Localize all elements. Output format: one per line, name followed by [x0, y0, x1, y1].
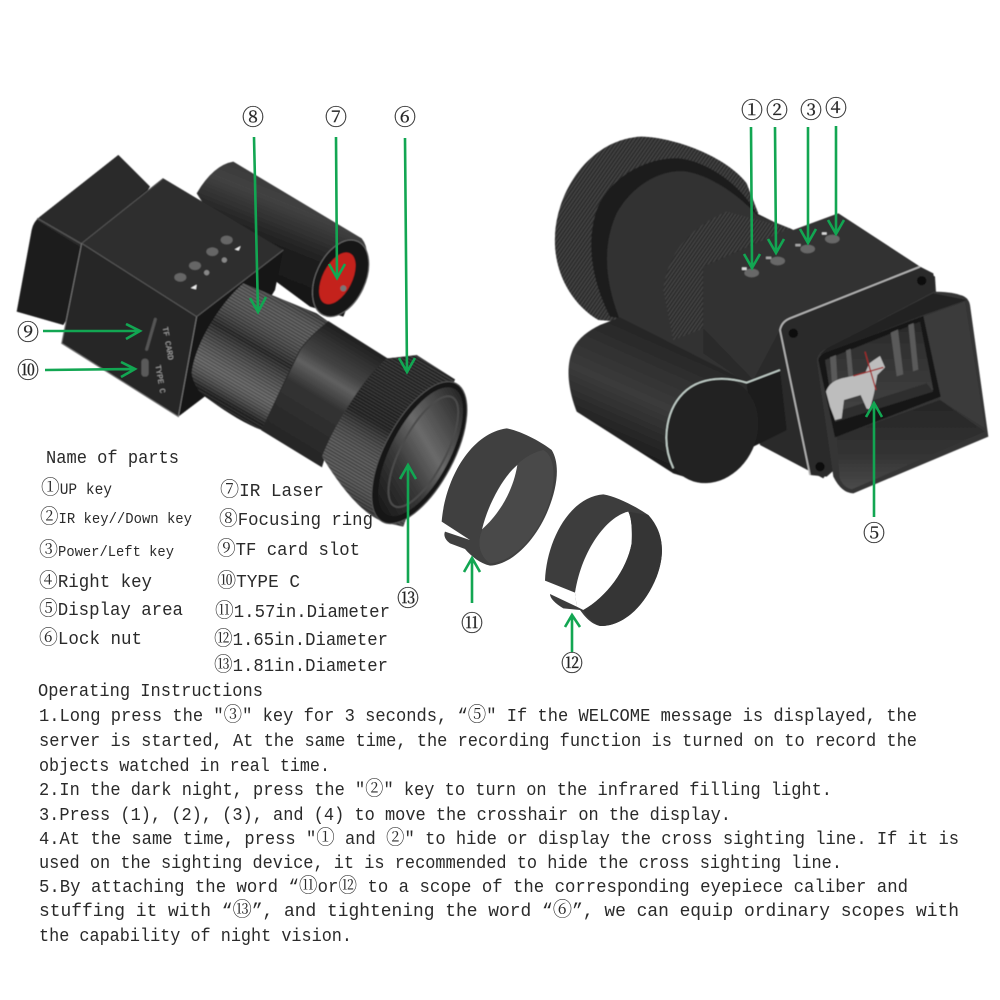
label 5 with arrow: ⑤ — [863, 517, 885, 548]
mid barrel — [262, 322, 387, 467]
label 1 with arrow: ① — [741, 94, 763, 125]
body housing — [703, 213, 937, 478]
part 8: ⑧Focusing ring — [219, 502, 373, 531]
thermal image of deer — [826, 356, 885, 420]
eyepiece hood — [817, 292, 988, 493]
label 6 with arrow — [394, 101, 416, 372]
part 2: ②IR key//Down key — [40, 500, 192, 529]
part 4: ④Right key — [39, 564, 152, 593]
label 5 with arrow — [863, 403, 885, 548]
label 2 with arrow — [766, 94, 788, 253]
instruction 1: server is started, At the same time, the recording function is turned on to record the — [39, 731, 917, 752]
label 12 with arrow — [561, 615, 583, 678]
label 3 with arrow — [800, 94, 822, 243]
dark groove — [591, 158, 773, 333]
label 13 with arrow: ⑬ — [397, 582, 419, 613]
lens barrel — [192, 283, 486, 538]
label 4 with arrow: ④ — [825, 92, 847, 123]
part 3: ③Power/Left key — [39, 533, 174, 562]
laser tube — [197, 162, 380, 326]
part 1: ①UP key — [41, 471, 112, 500]
instruction 5: stuffing it with “⑬”, and tightening the word “⑥”, we can equip ordinary scopes with — [39, 893, 959, 922]
instruction 5: the capability of night vision. — [39, 926, 352, 947]
parts heading: Name of parts — [46, 448, 179, 469]
rear of device — [555, 137, 937, 499]
instruction 1: 1.Long press the ″③″ key for 3 seconds, “⑤″ If the WELCOME message is displayed, the — [39, 698, 917, 727]
adapter ring 12 — [545, 494, 662, 626]
display screen — [818, 316, 941, 437]
label 3 with arrow: ③ — [800, 94, 822, 125]
part 6: ⑥Lock nut — [39, 621, 142, 650]
laser tube — [569, 317, 787, 499]
part 9: ⑨TF card slot — [217, 532, 360, 561]
part 11: ⑪1.57in.Diameter — [215, 594, 390, 623]
instruction 4: 4.At the same time, press ″① and ②″ to hide or display the cross sighting line. If it is — [39, 821, 959, 850]
device: left view with lens — [17, 155, 486, 538]
label 7 with arrow — [325, 101, 347, 278]
label 6 with arrow: ⑥ — [394, 101, 416, 132]
instruction 5 — [39, 869, 959, 947]
label 13 with arrow — [397, 465, 419, 613]
label 4 with arrow — [825, 92, 847, 234]
instruction 4: used on the sighting device, it is recommended to hide the cross sighting line. — [39, 853, 842, 874]
instruction 1 — [39, 698, 917, 777]
focusing ring — [192, 283, 328, 430]
parts list: Name of parts — [39, 448, 390, 677]
keys on top of body — [174, 236, 241, 289]
device: right view with display — [555, 137, 988, 499]
instruction 4 — [39, 821, 959, 874]
part 5: ⑤Display area — [39, 592, 183, 621]
label 9 with arrow: ⑨ — [17, 316, 39, 347]
front lens — [352, 367, 486, 538]
instruction 5: 5.By attaching the word “⑪or⑫ to a scope of the corresponding eyepiece caliber and — [39, 869, 908, 898]
label 8 with arrow: ⑧ — [242, 101, 264, 132]
label 11 with arrow — [461, 558, 483, 638]
lock nut — [322, 355, 455, 527]
part 10: ⑩TYPE C — [217, 564, 300, 593]
label 11 with arrow: ⑪ — [461, 607, 483, 638]
eyepiece hood — [17, 155, 150, 325]
instructions heading: Operating Instructions — [38, 681, 263, 702]
instruction 2: 2.In the dark night, press the ″②″ key to turn on the infrared filling light. — [39, 772, 832, 801]
instruction 1: objects watched in real time. — [39, 756, 330, 777]
label 9 with arrow — [17, 316, 140, 347]
face plate — [780, 267, 937, 477]
TF card slot and USB port — [141, 319, 174, 394]
instruction 3: 3.Press (1), (2), (3), and (4) to move the crosshair on the display. — [39, 805, 731, 826]
number labels and arrows — [17, 92, 885, 678]
red crosshair — [853, 352, 883, 390]
eyepiece end — [780, 267, 988, 493]
part 13: ⑬1.81in.Diameter — [214, 648, 388, 677]
label 8 with arrow — [242, 101, 266, 312]
keys on body — [742, 232, 840, 277]
rear housing — [17, 155, 380, 417]
adapter ring 11 — [442, 428, 557, 566]
focusing ring knurl — [663, 212, 790, 340]
label 2 with arrow: ② — [766, 94, 788, 125]
label 10 with arrow: ⑩ — [17, 354, 39, 385]
label 7 with arrow: ⑦ — [325, 101, 347, 132]
part 7: ⑦IR Laser — [220, 473, 324, 502]
lock nut ring — [555, 137, 758, 323]
operating instructions text block — [38, 681, 959, 947]
label 10 with arrow — [17, 354, 135, 385]
part 12: ⑫1.65in.Diameter — [214, 622, 388, 651]
TF card slot and USB port: TYPE C — [152, 364, 166, 394]
label 12 with arrow: ⑫ — [561, 647, 583, 678]
body housing — [62, 178, 283, 417]
TF card slot and USB port: TF CARD — [160, 326, 174, 361]
label 1 with arrow — [741, 94, 763, 268]
barrel — [607, 171, 790, 383]
